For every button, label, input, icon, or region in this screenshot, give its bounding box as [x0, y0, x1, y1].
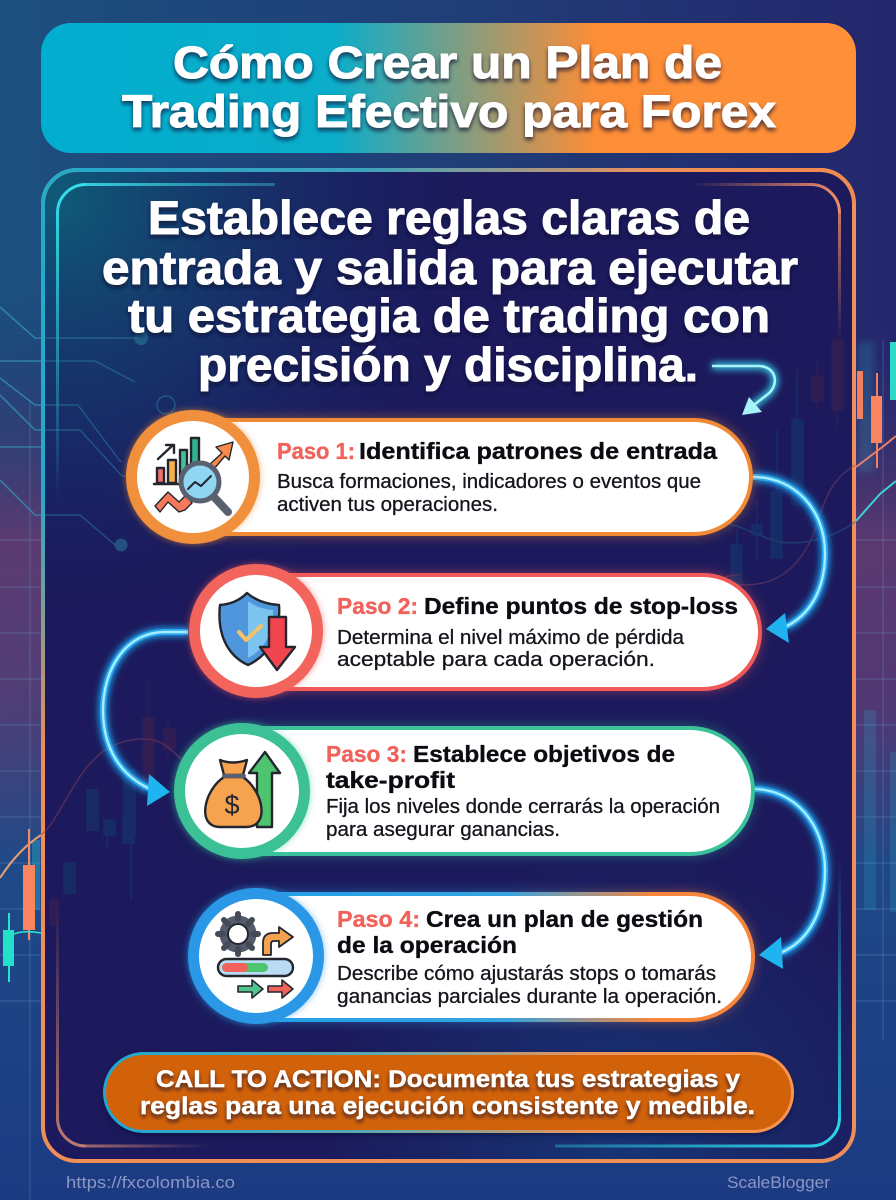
text: step 2: Paso 2:: [337, 593, 418, 619]
icon: shield and down arrow: [219, 593, 295, 670]
arrow: step 2 to step 3: [103, 632, 188, 806]
footer: url: https://fxcolombia.co: [66, 1174, 235, 1192]
step 4 card: [188, 888, 753, 1024]
title: Cómo Crear un Plan de: [173, 37, 722, 88]
circuit lines in panel: [41, 331, 175, 552]
text: step 1: activen tus operaciones.: [277, 494, 498, 516]
arrow: subtitle to step 1: [712, 366, 775, 415]
text: step 4: de la operación: [337, 932, 517, 958]
candles in panel: [41, 330, 855, 925]
text: step 2: aceptable para cada operación.: [337, 649, 655, 671]
icon: money bag and up arrow: [205, 752, 280, 827]
icon: gear, bar and arrows: [218, 914, 293, 998]
subtitle: entrada y salida para ejecutar: [102, 241, 798, 294]
text: step 3: take-profit: [326, 767, 455, 793]
text: step 3: Fija los niveles donde cerrarás la operación: [326, 796, 720, 818]
candles: right edge: [856, 342, 896, 521]
subtitle: precisión y disciplina.: [198, 338, 698, 391]
call to action: CALL TO ACTION: Documenta tus estrategias y: [156, 1066, 741, 1093]
text: step 2: [337, 593, 738, 671]
title: [122, 37, 776, 137]
text: step 3: Paso 3:: [326, 741, 407, 767]
subtitle: Establece reglas claras de: [148, 191, 750, 244]
text: step 1: [277, 438, 718, 516]
text: step 3: para asegurar ganancias.: [326, 819, 560, 841]
panel: main: [41, 168, 856, 1163]
text: step 1: Paso 1:: [277, 438, 355, 464]
candles: left edge: [0, 829, 41, 982]
call to action: [104, 1054, 792, 1134]
text: step 2: Determina el nivel máximo de pérdida: [337, 627, 685, 649]
text: step 3: Establece objetivos de: [413, 741, 675, 767]
icon: chart and magnifier: [154, 438, 233, 512]
text: step 1: Identifica patrones de entrada: [359, 438, 718, 464]
icon: money bag and up arrow: $: [224, 790, 240, 820]
call to action: reglas para una ejecución consistente y medible.: [140, 1093, 755, 1120]
arrow: step 3 to step 4: [753, 789, 825, 969]
text: step 4: [337, 906, 722, 1008]
arrow: step 1 to step 2: [753, 477, 825, 643]
footer: brand: ScaleBlogger: [727, 1174, 831, 1192]
subtitle: tu estrategia de trading con: [128, 289, 770, 342]
text: step 2: Define puntos de stop-loss: [424, 593, 738, 619]
step 3 card: [174, 723, 753, 859]
step 2 card: [189, 564, 760, 698]
text: step 4: ganancias parciales durante la operación.: [337, 986, 722, 1008]
step 1 card: [126, 410, 751, 544]
subtitle: [102, 191, 798, 391]
text: step 3: [326, 741, 720, 841]
header banner: [41, 23, 856, 153]
text: step 4: Describe cómo ajustarás stops o tomarás: [337, 963, 716, 985]
text: step 1: Busca formaciones, indicadores o eventos que: [277, 471, 701, 493]
text: step 4: Paso 4:: [337, 906, 420, 932]
title: Trading Efectivo para Forex: [122, 86, 776, 137]
text: step 4: Crea un plan de gestión: [426, 906, 703, 932]
